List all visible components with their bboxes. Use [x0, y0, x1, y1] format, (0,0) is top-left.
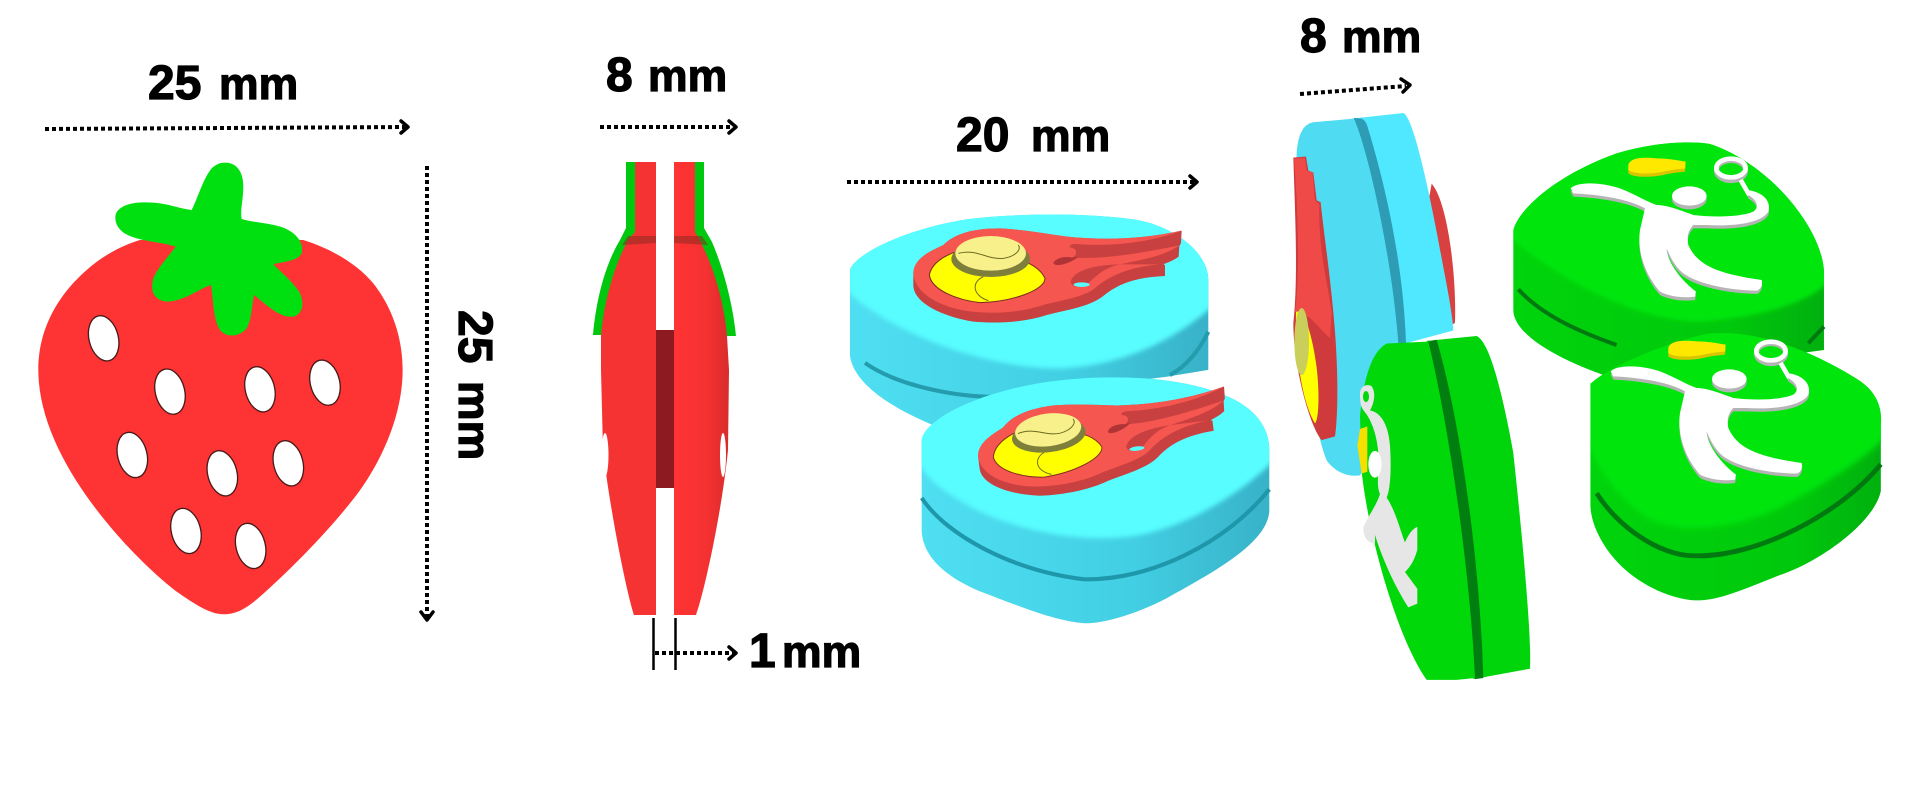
arrow: strawberry height — [421, 166, 433, 620]
player figure — [1611, 342, 1809, 484]
arrow: side width — [600, 121, 736, 133]
comet edge — [1293, 156, 1337, 440]
yellow flame — [1628, 158, 1686, 177]
right half green leaf edge — [695, 162, 736, 336]
icon: green dampener back — [1513, 142, 1826, 375]
icon: green dampener on edge — [1357, 336, 1530, 680]
strawberry body — [38, 240, 403, 614]
label: 8 mm upright: mm — [1342, 13, 1421, 62]
arrow: strawberry width — [45, 121, 408, 133]
white player figure — [1360, 385, 1417, 607]
icon: cyan dampener back — [850, 214, 1210, 424]
right half red — [674, 162, 729, 615]
left half green leaf edge — [593, 162, 635, 335]
label: 20 mm: 20 — [956, 109, 1009, 162]
left half red — [601, 162, 656, 615]
thickness marker lines — [654, 618, 676, 670]
slot core — [656, 330, 674, 488]
arrow: 20 mm — [847, 176, 1197, 188]
label: 25 mm width: 25 — [148, 57, 201, 110]
strawberry seeds — [84, 312, 345, 572]
arrow: 8 mm upright — [1300, 79, 1410, 94]
label: 25 mm height: mm — [449, 381, 498, 460]
label: 1 mm: 1 — [749, 625, 776, 678]
icon: cyan dampener front — [920, 377, 1271, 624]
icon: strawberry front view — [38, 163, 403, 614]
label: 8 mm upright: 8 — [1300, 10, 1327, 63]
comet logo — [913, 228, 1182, 323]
seed slits — [602, 433, 726, 477]
yellow edge flame — [1357, 426, 1367, 474]
label: 25 mm width: mm — [219, 60, 298, 109]
player figure — [1571, 159, 1769, 301]
label: 20 mm: mm — [1031, 112, 1110, 161]
icon: cyan dampener on edge — [1293, 113, 1455, 476]
label: 8 mm side width: mm — [648, 52, 727, 101]
icon: strawberry side view — [593, 162, 736, 615]
arrow: 1 mm — [655, 647, 736, 659]
strawberry leaf — [115, 163, 302, 335]
comet logo — [973, 384, 1235, 504]
shadow under leaf — [622, 236, 708, 245]
label: 25 mm height: 25 — [448, 310, 501, 363]
label: 8 mm side width: 8 — [606, 49, 633, 102]
yellow flame — [1668, 341, 1726, 360]
icon: green dampener front — [1590, 333, 1882, 600]
label: 1 mm: mm — [782, 628, 861, 677]
